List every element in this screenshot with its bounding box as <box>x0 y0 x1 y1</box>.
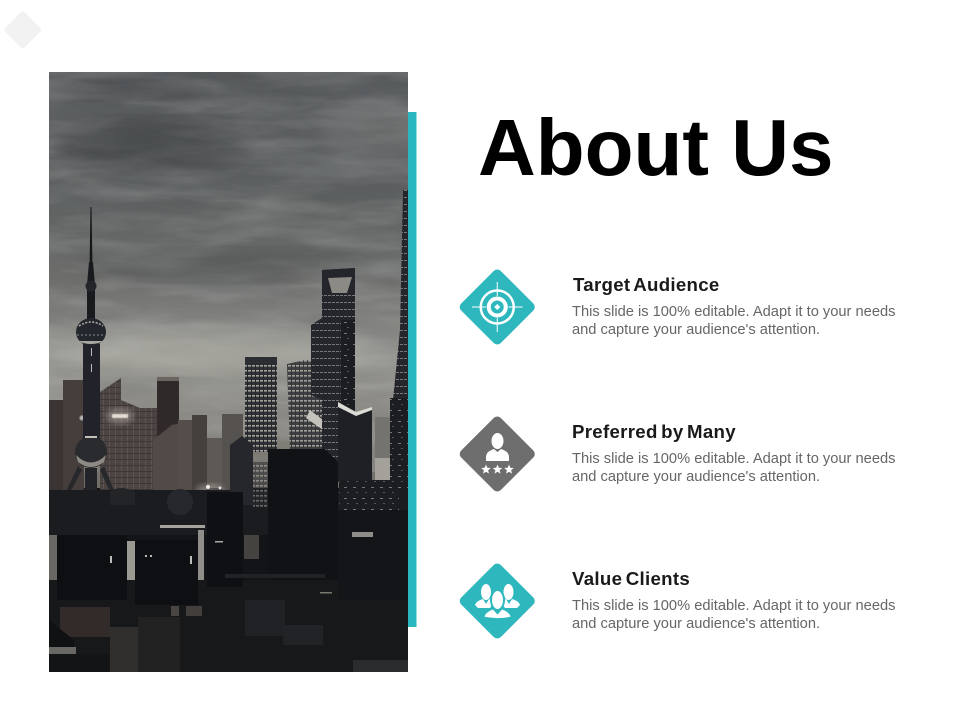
body: value clients <box>572 598 895 632</box>
body: target audience: and capture your audience's attention. <box>572 322 820 338</box>
Shanghai World Financial Center <box>311 268 355 470</box>
title: About Us <box>478 103 834 192</box>
heading: target audience: Target Audience <box>573 274 720 295</box>
icon: preferred by many diamond <box>458 414 537 494</box>
body: value clients: This slide is 100% editable. Adapt it to your needs <box>572 598 895 614</box>
accent bar <box>408 112 416 627</box>
heading: value clients: Value Clients <box>572 568 690 589</box>
decorative corner diamond <box>4 12 535 672</box>
dark base behind lower city <box>84 488 339 580</box>
body: target audience: This slide is 100% editable. Adapt it to your needs <box>572 304 895 320</box>
dark tower with bright roof <box>338 402 372 482</box>
icon: value clients diamond <box>458 561 537 641</box>
sky with clouds <box>49 72 408 488</box>
body: value clients: and capture your audience's attention. <box>572 616 820 632</box>
glow of street lights <box>80 408 224 496</box>
body: preferred by many: and capture your audience's attention. <box>572 469 820 485</box>
text block: target audience <box>572 274 895 338</box>
Shanghai Tower <box>390 190 409 493</box>
body: preferred by many: This slide is 100% editable. Adapt it to your needs <box>572 451 895 467</box>
mid-ground dark blocks <box>49 436 408 580</box>
skyscraper with lit floors, centre <box>287 360 323 450</box>
body: preferred by many <box>572 451 895 485</box>
text block: preferred by many <box>572 421 895 485</box>
Oriental Pearl tower <box>66 207 114 490</box>
foreground dark buildings <box>49 449 408 672</box>
heading: preferred by many: Preferred by Many <box>572 421 736 442</box>
icon: target audience diamond <box>458 267 537 347</box>
photo: city skyline at dusk <box>49 72 408 672</box>
distant towers <box>49 377 390 495</box>
skyscraper with lit floors, left <box>245 357 277 452</box>
text block: value clients <box>572 568 895 632</box>
body: target audience <box>572 304 895 338</box>
